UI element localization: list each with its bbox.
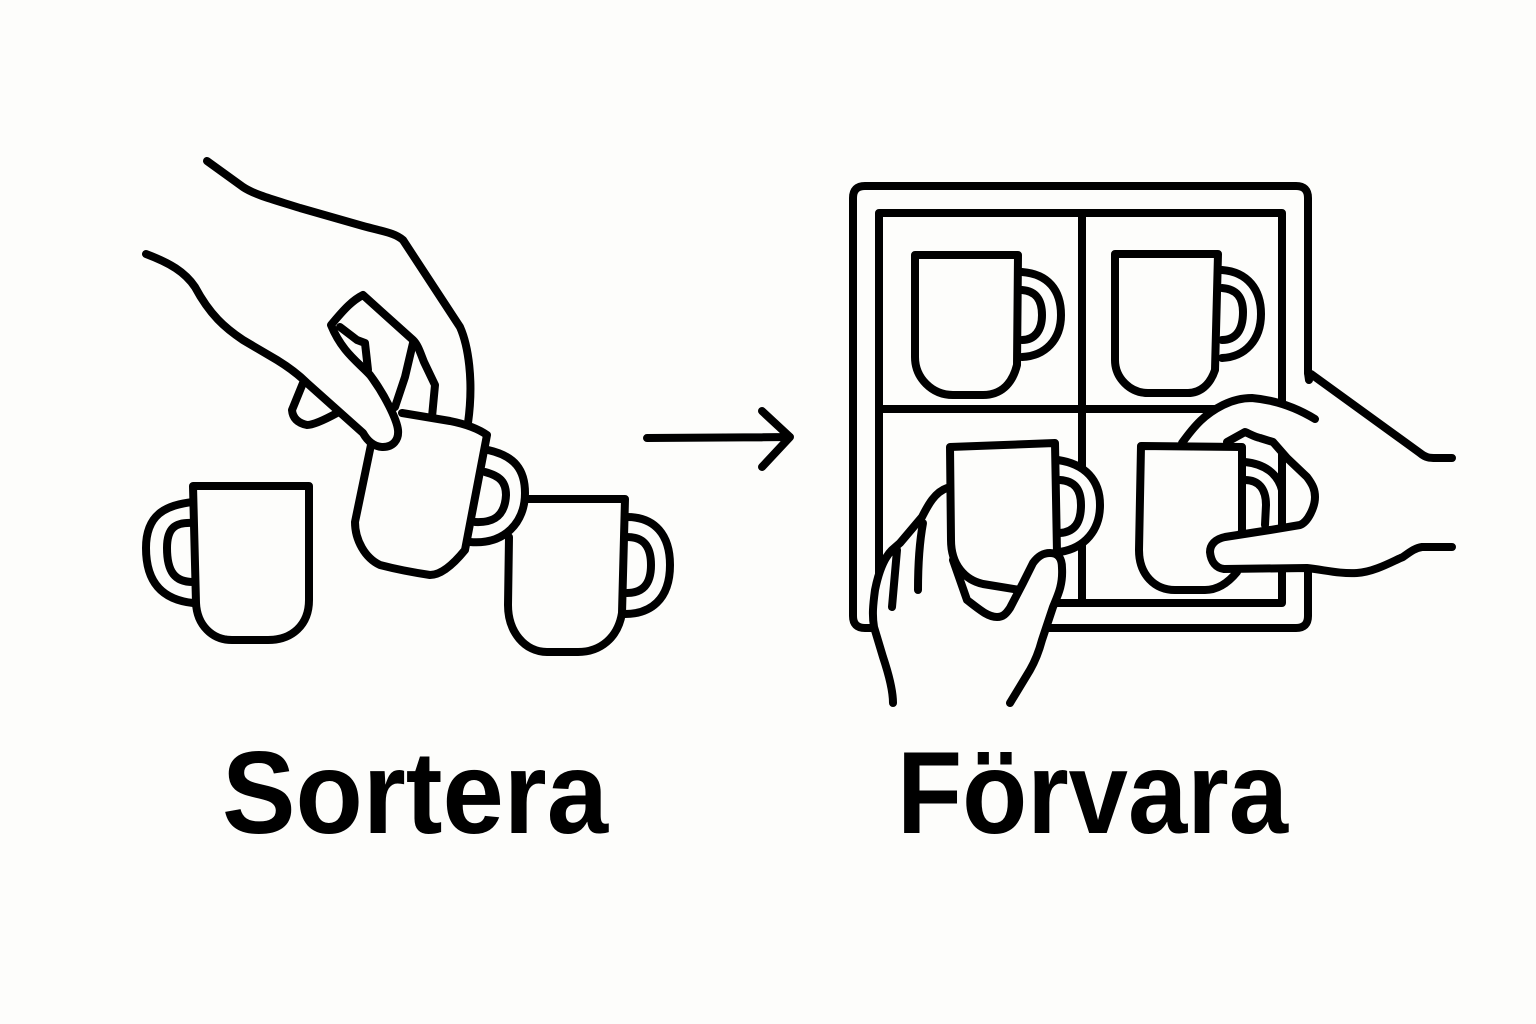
heading: Förvara: Förvara: [897, 727, 1289, 858]
icon: held mug: [355, 413, 525, 575]
icon: shelf frame: [853, 186, 1308, 628]
icon: left hand and placed mug: [873, 443, 1100, 703]
panel: storing illustration: [853, 186, 1452, 703]
icon: shelf mug top left: [915, 255, 1061, 395]
icon: sorting hand: [146, 161, 470, 447]
panel: sorting illustration: [146, 161, 670, 652]
icon: right hand and placed mug: [1139, 373, 1452, 590]
icon: right mug: [508, 499, 670, 652]
arrow: [647, 411, 790, 467]
icon: shelf mug top right: [1115, 254, 1261, 393]
heading: Sortera: Sortera: [222, 727, 609, 858]
icon: left mug: [146, 486, 309, 640]
